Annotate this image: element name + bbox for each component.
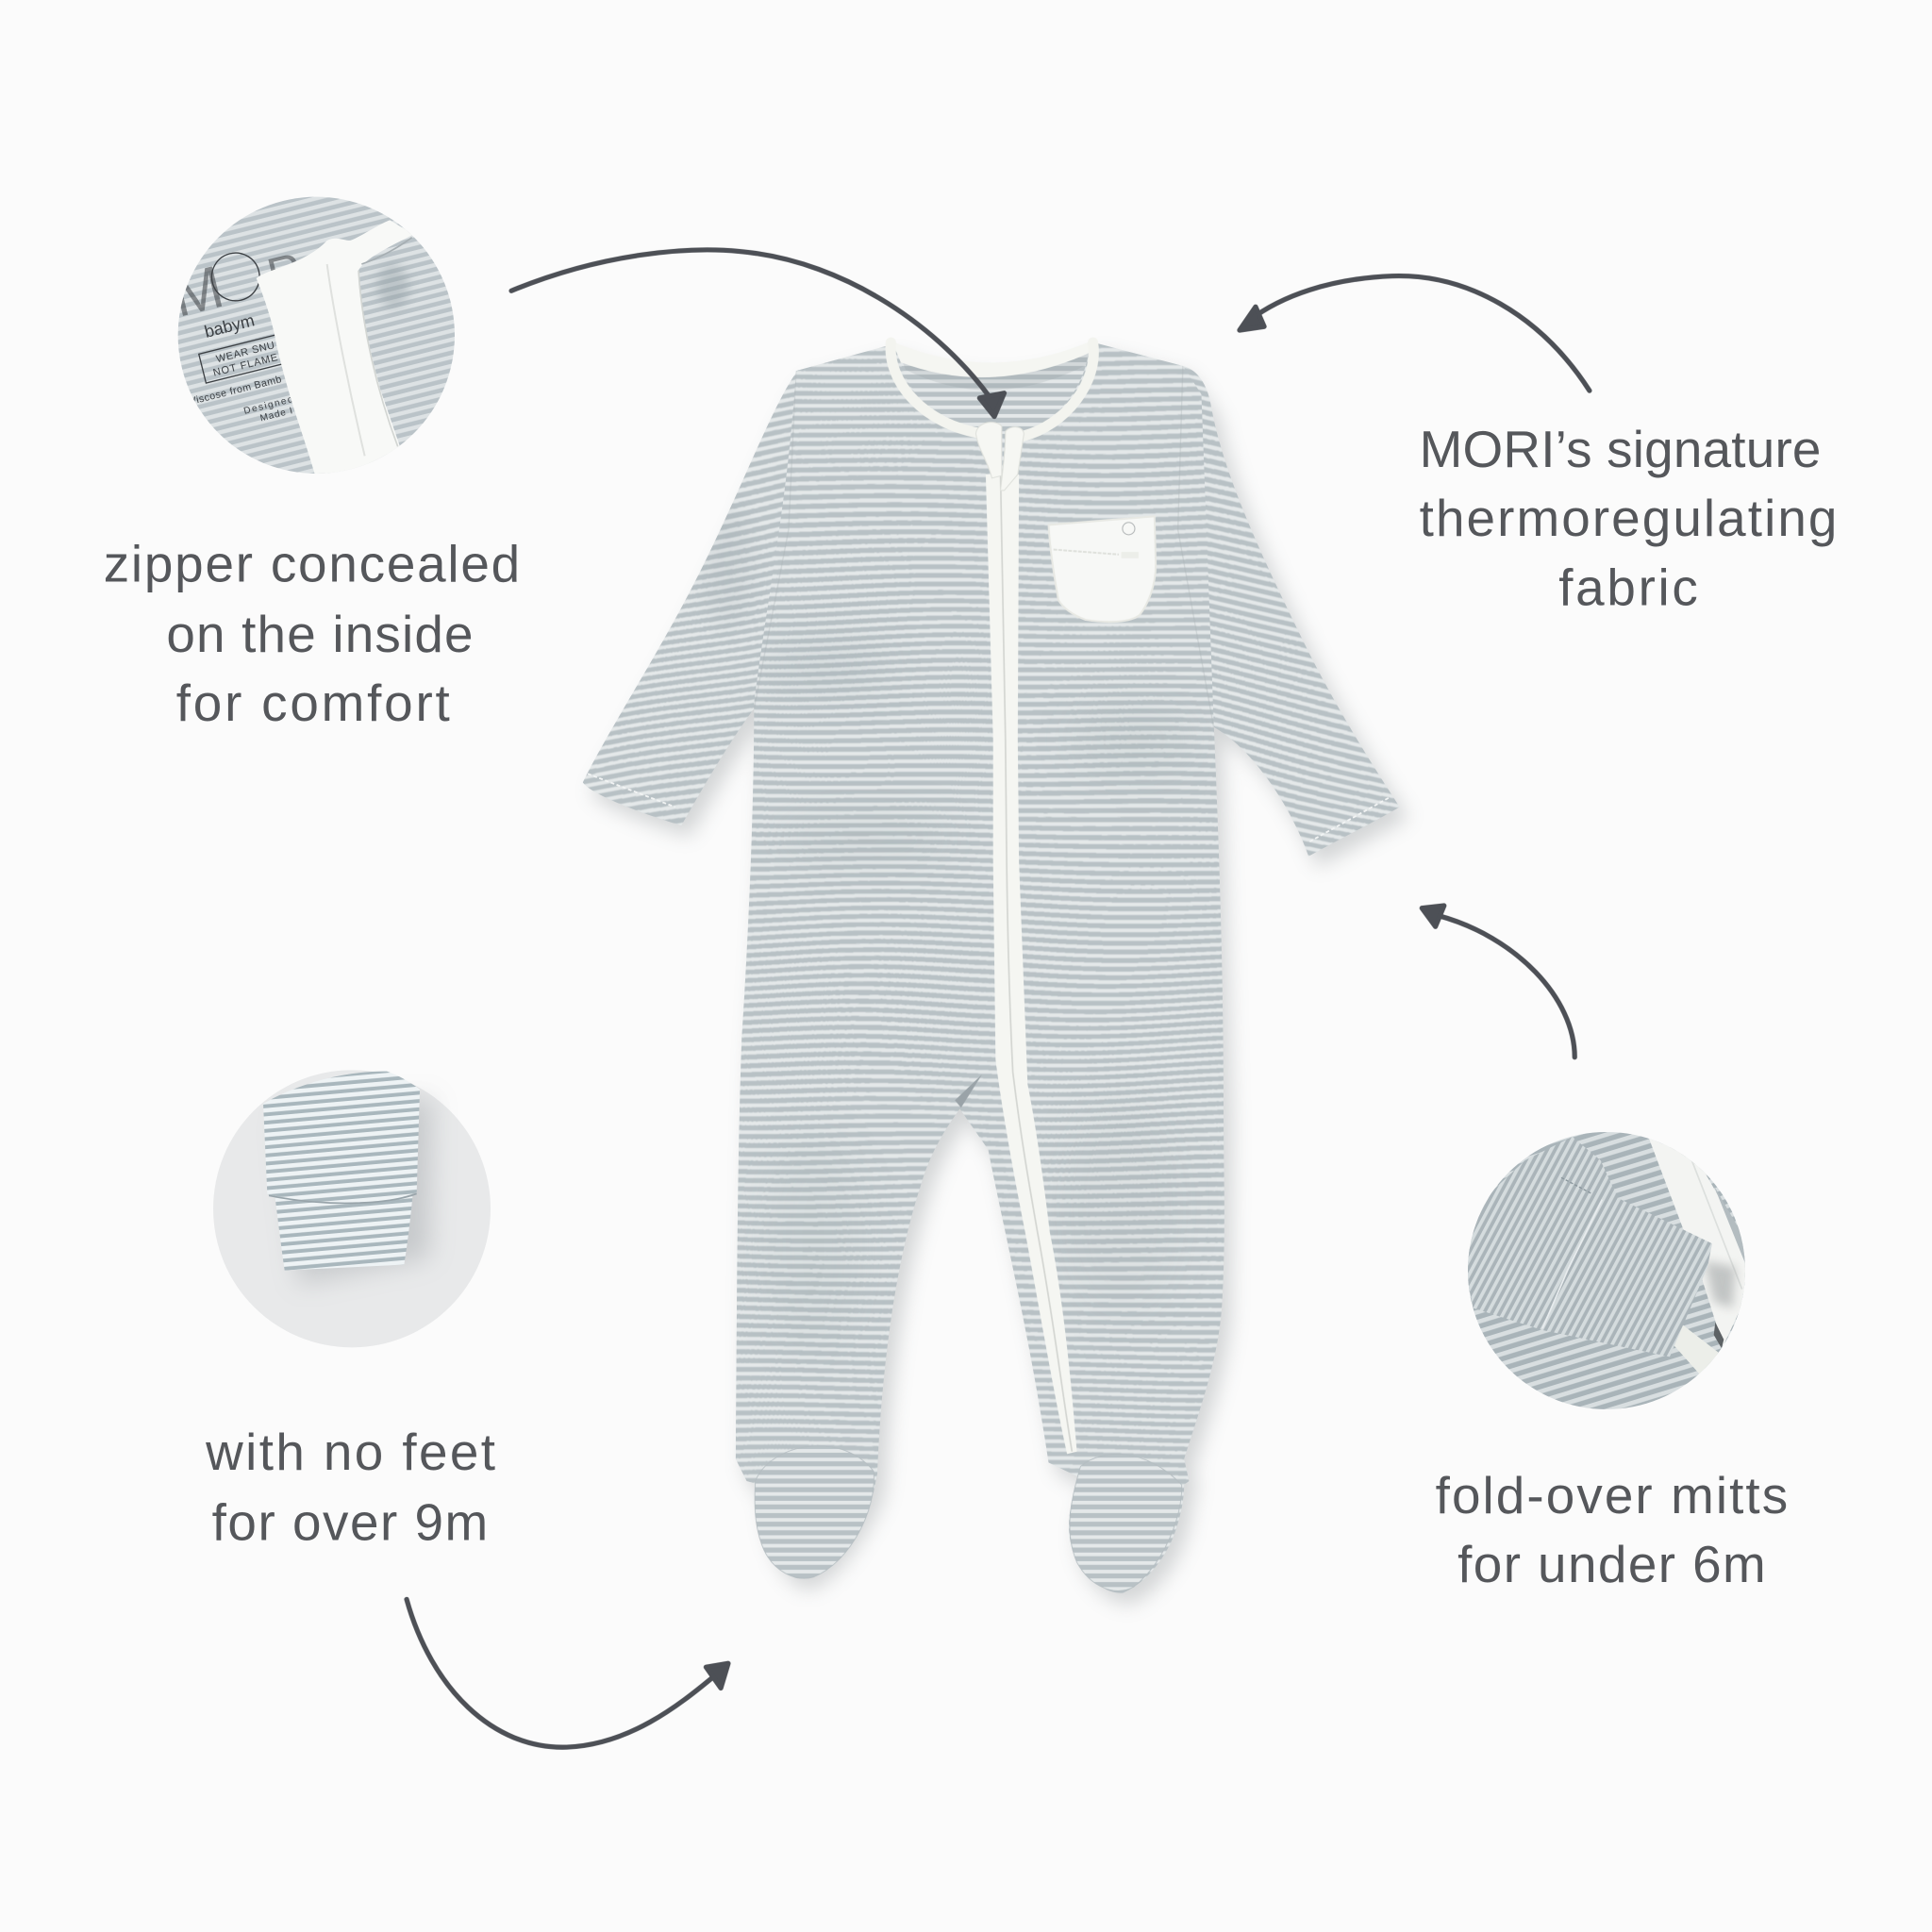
caption: fold-over mitts: fold-over mitts: [1436, 1466, 1788, 1524]
garment: sleepsuit: [542, 321, 1429, 1614]
folded mitt: [263, 1072, 420, 1202]
caption: fold-over mitts: [1436, 1466, 1788, 1593]
arrow: to zipper: [511, 250, 1004, 416]
front collar binding: [891, 342, 1093, 436]
white tape: [1674, 1324, 1719, 1374]
right sleeve: [1183, 366, 1399, 857]
printed label text: Designed: [242, 394, 294, 417]
body and legs: [736, 343, 1224, 1593]
left sleeve: [583, 370, 798, 825]
garment shadow: [591, 354, 1408, 1605]
printed label text: babym: [203, 310, 257, 341]
lower cuff: [275, 1196, 412, 1271]
left foot: [755, 1446, 874, 1578]
caption: zipper concealed: zipper concealed: [104, 534, 520, 592]
back neck fabric: [897, 349, 1090, 434]
back collar band: [892, 340, 1093, 377]
caption: signature fabric: [1420, 420, 1837, 616]
printed label text: Viscose from Bamb: [189, 374, 283, 408]
printed label text: [157, 234, 336, 440]
arrow: to feet: [407, 1599, 728, 1747]
printed label text: WEAR SNU: [215, 340, 275, 365]
caption: no feet: [205, 1423, 495, 1552]
right foot: [1070, 1454, 1182, 1591]
zipper flap: [257, 220, 413, 484]
white zipper strip: [1648, 1135, 1747, 1346]
caption: zipper concealed: [104, 534, 520, 732]
arrow: to cuff: [1422, 906, 1574, 1058]
panel: no-feet mitten photo circle: [213, 1070, 491, 1347]
zipper strip: [986, 475, 1077, 1454]
caption: fold-over mitts: for under 6m: [1457, 1535, 1766, 1593]
mitt: [1465, 1137, 1712, 1357]
caption: signature fabric: thermoregulating: [1420, 489, 1837, 547]
chest pocket: [1049, 516, 1156, 622]
printed label text: Made I: [259, 406, 293, 424]
arrow: to fabric: [1240, 275, 1590, 391]
caption: no feet: for over 9m: [212, 1493, 488, 1552]
caption: zipper concealed: on the inside: [166, 605, 474, 663]
caption: zipper concealed: for comfort: [176, 674, 450, 732]
caption: no feet: with no feet: [205, 1423, 495, 1481]
caption: signature fabric: MORI’s signature: [1420, 420, 1821, 478]
printed label text: M: [165, 254, 230, 330]
printed label text: R: [262, 242, 308, 302]
zipper pull: [975, 423, 1024, 491]
panel: zipper detail photo circle: [177, 196, 455, 474]
panel: fold-over mitt photo circle: [1462, 1125, 1752, 1415]
printed label text: NOT FLAME: [212, 352, 279, 379]
icon: pocket tag logo: [1122, 523, 1139, 558]
caption: signature fabric: fabric: [1558, 558, 1698, 616]
